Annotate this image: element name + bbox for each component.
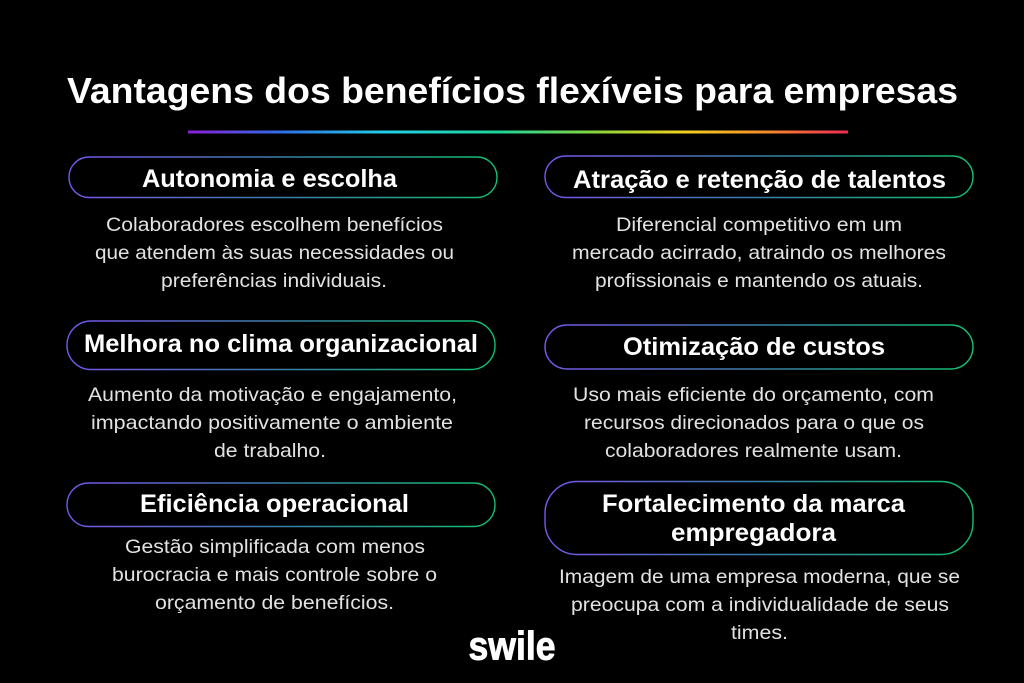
body text: Uso mais eficiente do orçamento, com bbox=[573, 384, 934, 406]
heading bbox=[602, 490, 906, 547]
body text: recursos direcionados para o que os bbox=[584, 412, 924, 434]
body text: preocupa com a individualidade de seus bbox=[571, 594, 949, 616]
logo: swile: swile bbox=[468, 624, 556, 668]
body text: Diferencial competitivo em um bbox=[616, 214, 902, 236]
panel: otimização de custos bbox=[545, 325, 973, 462]
body text: impactando positivamente o ambiente bbox=[91, 412, 453, 434]
heading: Fortalecimento da marca bbox=[602, 490, 906, 518]
heading: Otimização de custos bbox=[623, 333, 885, 361]
panel: fortalecimento da marca empregadora bbox=[545, 482, 973, 644]
body text bbox=[572, 214, 946, 292]
body text: Gestão simplificada com menos bbox=[125, 536, 425, 558]
heading pill bbox=[545, 325, 973, 369]
heading pill bbox=[69, 157, 497, 198]
panel: atração e retenção de talentos bbox=[545, 156, 973, 292]
body text: que atendem às suas necessidades ou bbox=[95, 242, 454, 264]
body text bbox=[95, 214, 454, 292]
body text: preferências individuais. bbox=[161, 270, 387, 292]
body text: Aumento da motivação e engajamento, bbox=[88, 384, 457, 406]
body text: de trabalho. bbox=[214, 440, 326, 462]
panel: melhora no clima organizacional bbox=[67, 321, 495, 462]
body text bbox=[88, 384, 457, 462]
rainbow divider bbox=[188, 130, 848, 134]
panel: autonomia e escolha bbox=[69, 157, 497, 292]
heading pill bbox=[67, 483, 495, 526]
body text: mercado acirrado, atraindo os melhores bbox=[572, 242, 946, 264]
body text: colaboradores realmente usam. bbox=[605, 440, 902, 462]
body text: times. bbox=[731, 622, 788, 644]
body text bbox=[559, 566, 960, 644]
heading: Atração e retenção de talentos bbox=[573, 166, 946, 194]
title: Vantagens dos benefícios flexíveis para empresas bbox=[67, 70, 958, 111]
body text bbox=[573, 384, 934, 462]
body text: burocracia e mais controle sobre o bbox=[112, 564, 437, 586]
heading: Melhora no clima organizacional bbox=[84, 330, 478, 358]
heading pill bbox=[545, 482, 973, 554]
body text bbox=[112, 536, 437, 614]
heading pill bbox=[545, 156, 973, 198]
panel: eficiência operacional bbox=[67, 483, 495, 614]
body text: Colaboradores escolhem benefícios bbox=[106, 214, 443, 236]
body text: Imagem de uma empresa moderna, que se bbox=[559, 566, 960, 588]
heading: empregadora bbox=[671, 519, 837, 547]
body text: orçamento de benefícios. bbox=[155, 592, 394, 614]
heading pill bbox=[67, 321, 495, 370]
heading: Eficiência operacional bbox=[140, 490, 409, 518]
body text: profissionais e mantendo os atuais. bbox=[595, 270, 923, 292]
heading: Autonomia e escolha bbox=[142, 165, 398, 193]
